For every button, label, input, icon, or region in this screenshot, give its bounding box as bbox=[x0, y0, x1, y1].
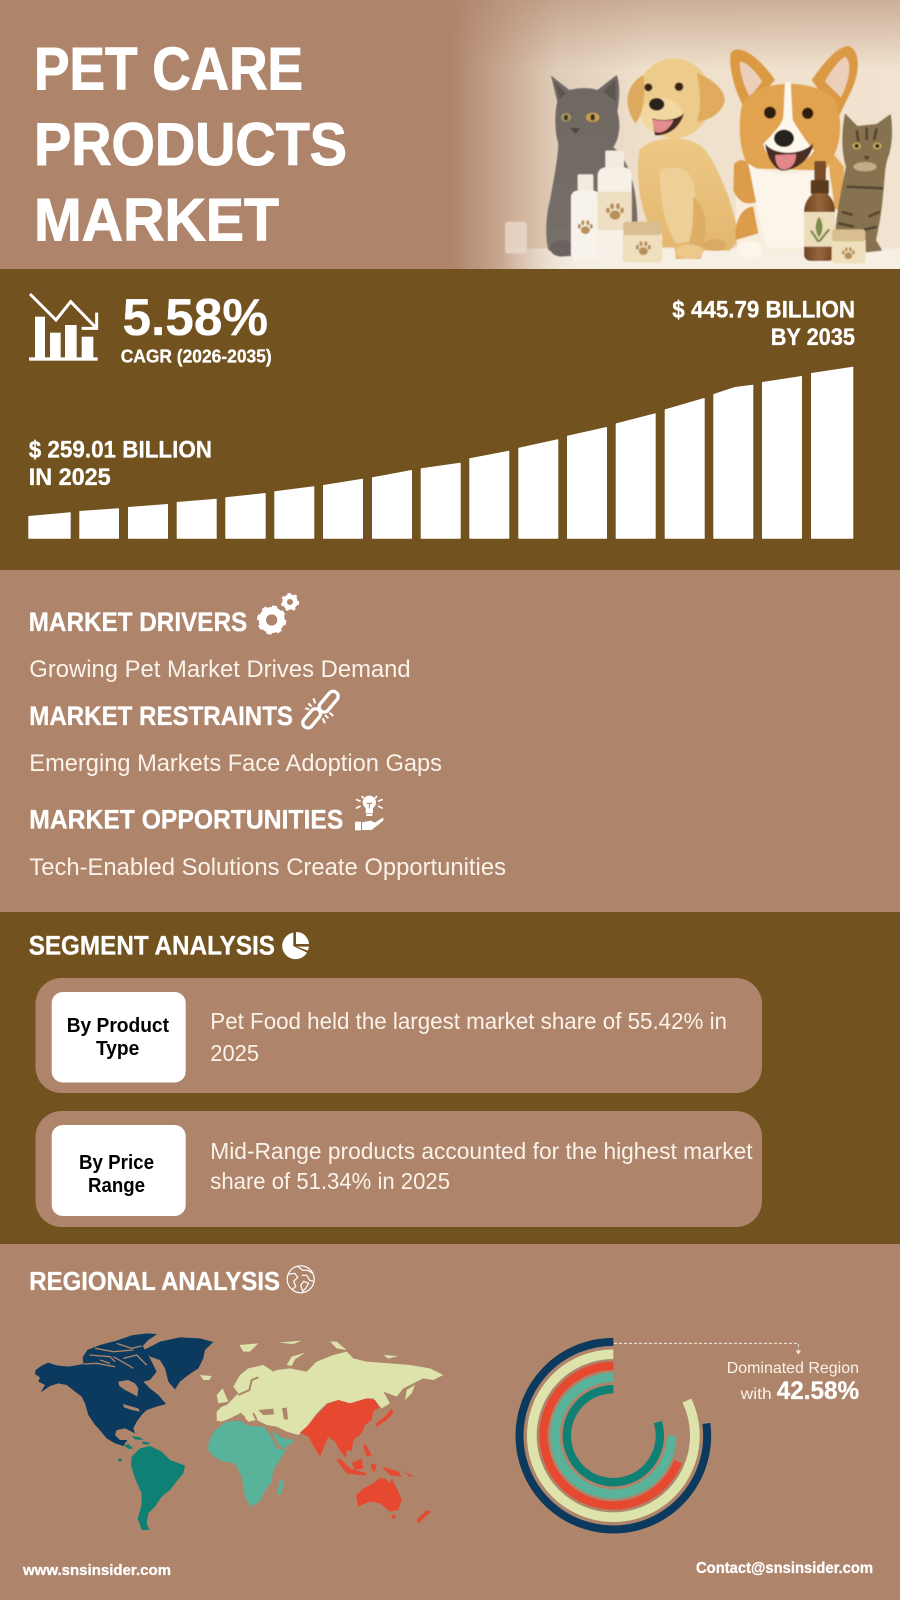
2035 value: $ 445.79 BILLION bbox=[672, 297, 855, 324]
2035 value: BY 2035 bbox=[771, 324, 855, 351]
label box: by price range: By Price bbox=[79, 1152, 154, 1174]
heading: market restraints: MARKET RESTRAINTS bbox=[29, 701, 293, 731]
title: MARKET bbox=[34, 186, 279, 254]
icon: globe bbox=[287, 1266, 314, 1293]
radial chart: regional share bbox=[520, 1342, 707, 1529]
panel: regional analysis bbox=[29, 1266, 859, 1530]
panel: segment analysis bbox=[0, 912, 900, 1244]
description: pet food share bbox=[210, 1008, 727, 1066]
2025 value bbox=[29, 437, 212, 491]
description: pet food share: Pet Food held the largest market share of 55.42% in bbox=[210, 1008, 727, 1034]
icon: chart with trend arrow bbox=[29, 294, 98, 361]
contact: Contact@snsinsider.com bbox=[696, 1560, 873, 1577]
callout: dominated region bbox=[727, 1360, 859, 1405]
description: mid-range share: Mid-Range products accounted for the highest market bbox=[210, 1138, 753, 1164]
CAGR value: 5.58% bbox=[122, 289, 268, 347]
heading: market drivers: MARKET DRIVERS bbox=[29, 607, 247, 637]
callout: dominated region: 42.58% bbox=[777, 1377, 859, 1405]
heading: market opportunities: MARKET OPPORTUNITIES bbox=[29, 805, 343, 835]
illustration: pets with care products bbox=[500, 46, 900, 269]
text: opportunity: Tech-Enabled Solutions Create Opportunities bbox=[29, 854, 506, 881]
callout: dominated region: Dominated Region bbox=[727, 1360, 859, 1377]
description: pet food share: 2025 bbox=[210, 1040, 259, 1066]
text: driver: Growing Pet Market Drives Demand bbox=[29, 656, 411, 683]
tabby cat bbox=[835, 113, 892, 252]
heading: regional analysis: REGIONAL ANALYSIS bbox=[29, 1266, 280, 1296]
callout: dominated region: with bbox=[740, 1386, 772, 1403]
2035 value bbox=[672, 297, 855, 351]
region: South America bbox=[118, 1436, 185, 1530]
icon: pie chart bbox=[282, 932, 309, 959]
title: PRODUCTS bbox=[34, 111, 347, 178]
title bbox=[34, 36, 347, 254]
icon: gears bbox=[259, 594, 298, 633]
golden puppy bbox=[627, 58, 739, 259]
icon: lightbulb in hand bbox=[355, 796, 383, 830]
title: PET CARE bbox=[34, 36, 303, 102]
region: Asia Pacific bbox=[300, 1398, 431, 1523]
bottle with paw, small bbox=[571, 174, 600, 261]
label box: by product type: By Product bbox=[67, 1015, 169, 1037]
description: mid-range share: share of 51.34% in 2025 bbox=[210, 1168, 450, 1194]
jar with paw bbox=[623, 222, 662, 262]
card: by price range bbox=[36, 1111, 762, 1227]
label box: by product type: Type bbox=[96, 1038, 139, 1060]
world map bbox=[35, 1333, 443, 1530]
website: www.snsinsider.com bbox=[22, 1562, 171, 1579]
card: by product type bbox=[36, 978, 762, 1093]
region: North America bbox=[35, 1333, 213, 1446]
heading: segment analysis: SEGMENT ANALYSIS bbox=[29, 930, 275, 960]
2025 value: IN 2025 bbox=[29, 464, 111, 491]
label box: by product type bbox=[52, 992, 186, 1082]
label box: by price range: Range bbox=[88, 1175, 145, 1197]
region: Europe and North Asia bbox=[200, 1341, 443, 1435]
header background bbox=[0, 0, 900, 270]
description: mid-range share bbox=[210, 1138, 753, 1194]
region: Middle East and Africa bbox=[208, 1421, 295, 1507]
label box: by price range bbox=[52, 1125, 186, 1216]
panel: market size and CAGR bbox=[0, 269, 900, 570]
jar with paw, right bbox=[832, 229, 866, 263]
bar chart: market growth bbox=[29, 367, 853, 538]
amber spray bottle bbox=[804, 161, 835, 261]
gray cat bbox=[546, 75, 637, 257]
CAGR label: CAGR (2026-2035) bbox=[121, 345, 272, 366]
panel: market dynamics bbox=[29, 594, 506, 881]
2025 value: $ 259.01 BILLION bbox=[29, 437, 212, 464]
footer bbox=[22, 1560, 873, 1579]
text: restraint: Emerging Markets Face Adoption Gaps bbox=[29, 750, 442, 777]
callout arrow bbox=[614, 1343, 801, 1355]
bottle with paw, tall bbox=[598, 151, 632, 257]
corgi bbox=[730, 46, 858, 259]
icon: broken chain link bbox=[301, 689, 340, 730]
